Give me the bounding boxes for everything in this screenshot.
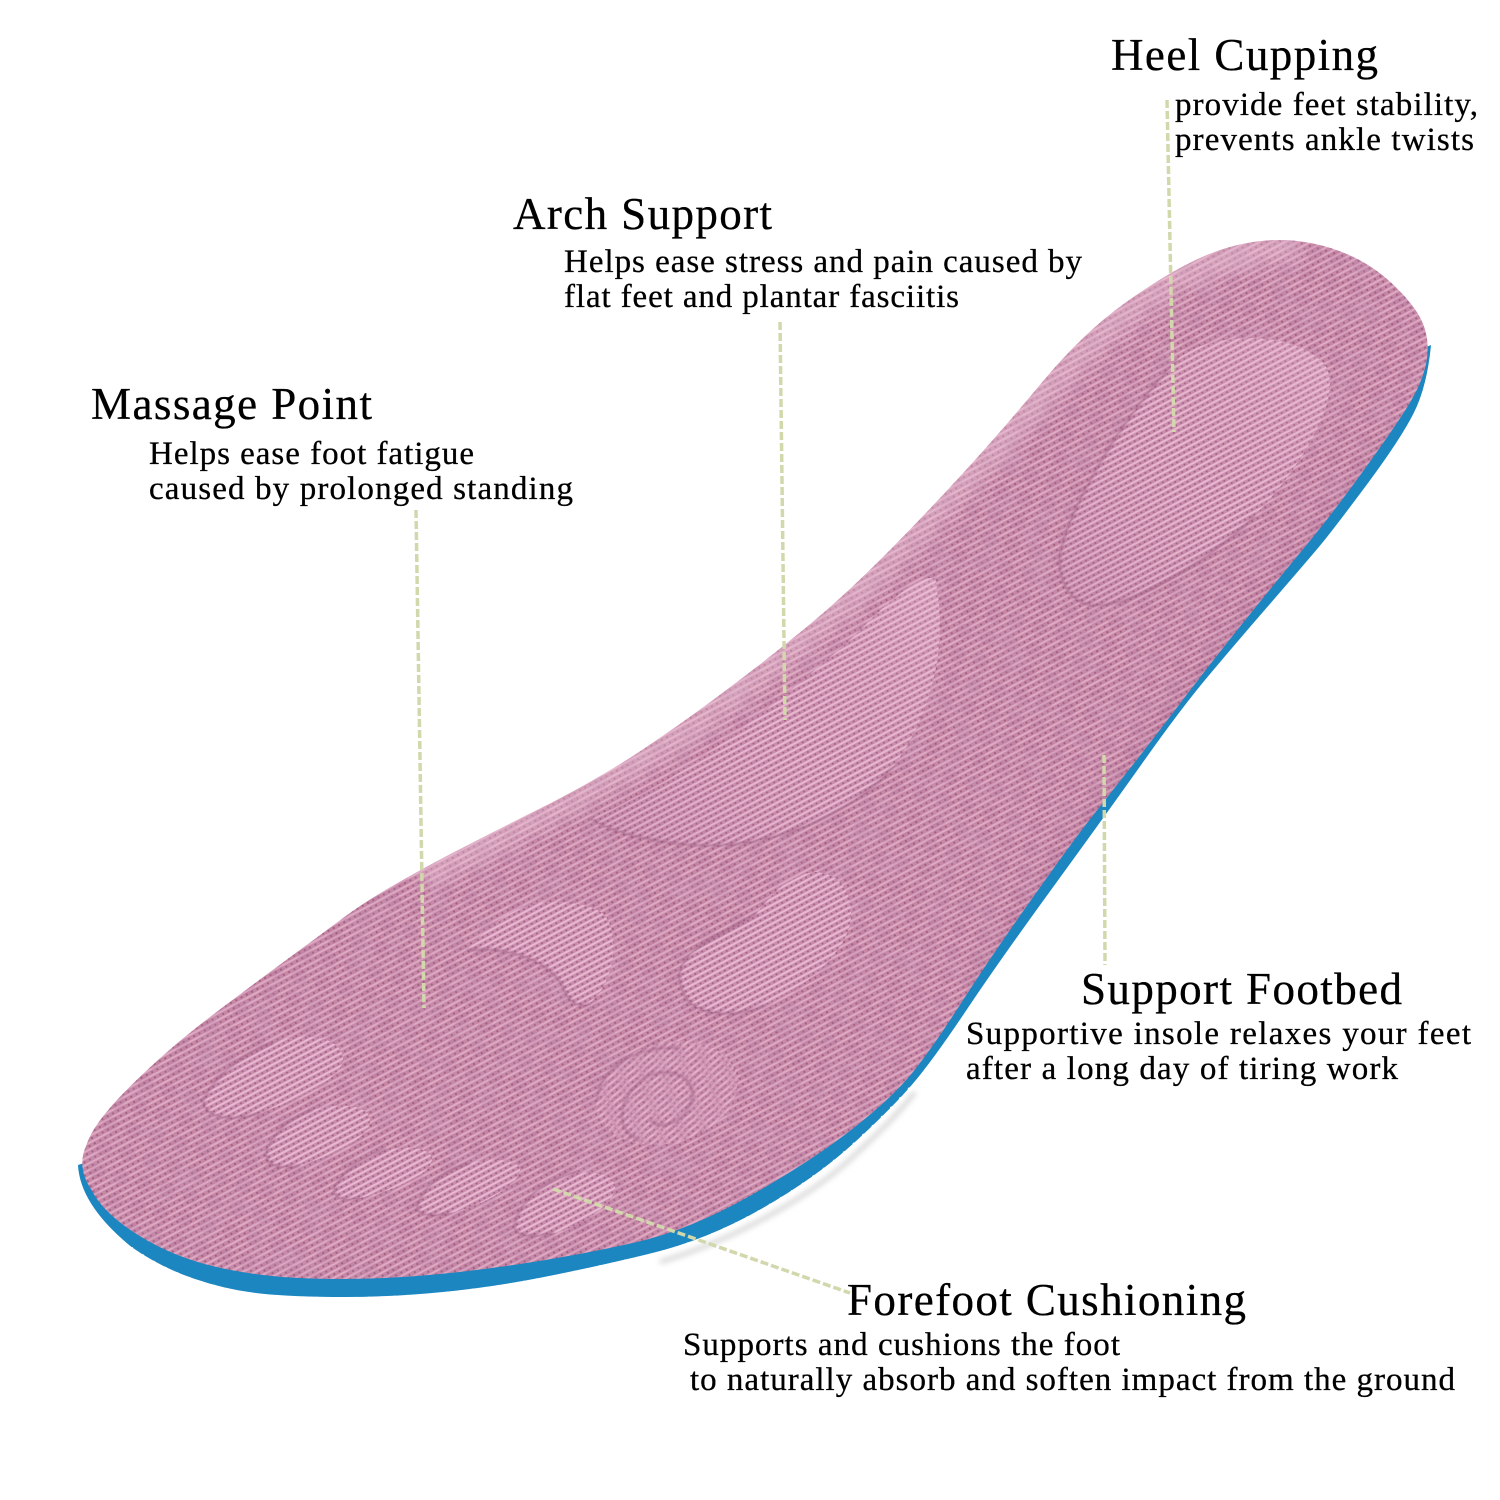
metatarsal pad (680, 872, 851, 1013)
blue foam base (78, 345, 1431, 1297)
callout: heel cupping (1111, 30, 1478, 158)
leader line: arch support (780, 322, 785, 720)
callout: heel cupping: provide feet stability, (1175, 87, 1478, 123)
leader line: massage point (416, 510, 424, 1008)
spiral pad (585, 1026, 749, 1160)
callout: massage point (91, 379, 573, 507)
toe pads (203, 1037, 615, 1235)
pink top surface (82, 240, 1428, 1279)
callout: support footbed (966, 964, 1471, 1087)
callout: massage point: Massage Point (91, 379, 372, 429)
callout: forefoot cushioning (683, 1275, 1456, 1398)
callout: forefoot cushioning: Supports and cushions the foot (683, 1327, 1120, 1363)
arch pad (590, 578, 940, 845)
callout: heel cupping: prevents ankle twists (1175, 122, 1474, 158)
crescent pad (467, 902, 614, 1005)
leader line: forefoot cushioning (553, 1189, 850, 1293)
ground shadow (660, 1092, 915, 1262)
callout: arch support (513, 189, 1082, 315)
surface massage bumps and highlights (60, 220, 1450, 1300)
scalloped foam edge (132, 1086, 913, 1299)
leader line: heel cupping (1167, 100, 1174, 432)
callout: massage point: Helps ease foot fatigue (149, 436, 474, 472)
callout: heel cupping: Heel Cupping (1111, 30, 1378, 80)
callout: arch support: Arch Support (513, 189, 772, 239)
callout: arch support: flat feet and plantar fasciitis (564, 279, 959, 315)
callout: massage point: caused by prolonged standing (149, 471, 573, 507)
callout: support footbed: Supportive insole relaxes your feet (966, 1016, 1471, 1052)
callout: support footbed: Support Footbed (1081, 964, 1402, 1014)
callout: support footbed: after a long day of tiring work (966, 1051, 1398, 1087)
callout: forefoot cushioning: Forefoot Cushioning (847, 1275, 1246, 1325)
insole illustration (60, 220, 1450, 1300)
leader line: support footbed (1104, 755, 1105, 965)
callout: forefoot cushioning: to naturally absorb and soften impact from the ground (690, 1362, 1456, 1398)
callout: arch support: Helps ease stress and pain caused by (564, 244, 1082, 280)
heel cup pad (1060, 338, 1330, 605)
